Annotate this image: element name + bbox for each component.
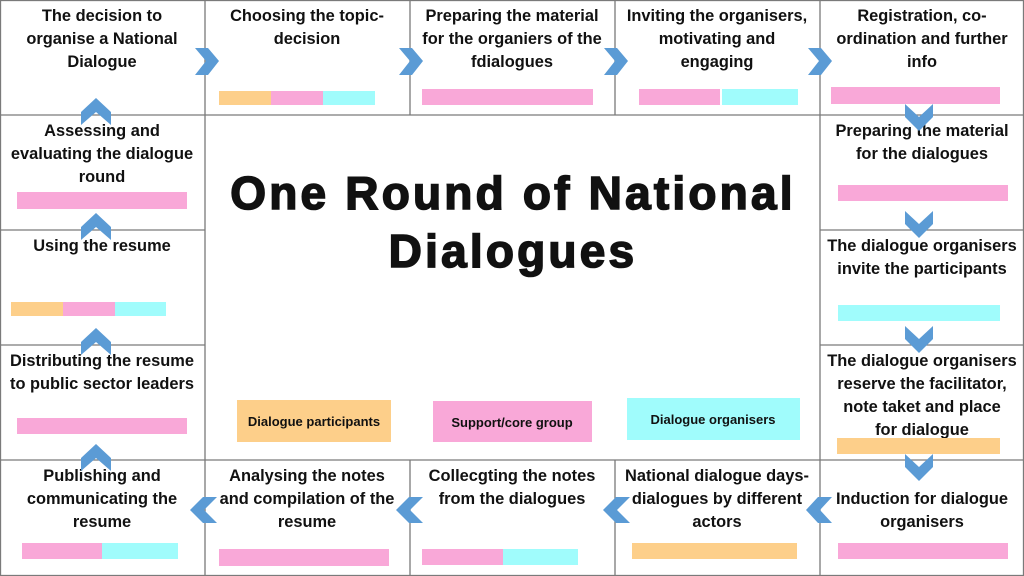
step: national dialogue days — [625, 467, 809, 559]
step: decision to organise: organise a National — [26, 30, 178, 48]
step: analysing notes: and compilation of the — [220, 490, 394, 508]
step: induction: Induction for dialogue — [836, 490, 1008, 508]
step: national dialogue days: National dialogue days- — [625, 467, 809, 485]
step: induction — [836, 490, 1008, 559]
step: publishing — [22, 467, 178, 559]
step: collecting notes: Collecgting the notes — [429, 467, 595, 485]
legend: Support/core group — [451, 415, 573, 430]
step: assessing: round — [79, 168, 125, 186]
step: registration — [831, 7, 1008, 104]
step: using resume — [11, 237, 171, 316]
step: invite participants: The dialogue organisers — [827, 237, 1017, 255]
arrows — [81, 48, 933, 523]
step: preparing material for organisers: for the organiers of the — [422, 30, 602, 48]
legend — [237, 398, 800, 442]
step: publishing: Publishing and — [43, 467, 161, 485]
step: analysing notes — [219, 467, 394, 566]
title — [230, 167, 796, 277]
step: assessing: Assessing and — [44, 122, 160, 140]
step: analysing notes: Analysing the notes — [229, 467, 385, 485]
step: choosing topic: decision — [274, 30, 340, 48]
step: preparing material for organisers: Preparing the material — [425, 7, 599, 25]
step: preparing material for organisers: fdialogues — [471, 53, 553, 71]
step: inviting organisers: Inviting the organisers, — [627, 7, 807, 25]
step: publishing: resume — [73, 513, 131, 531]
legend: Dialogue participants — [248, 414, 380, 429]
step: decision to organise — [26, 7, 178, 71]
step: registration: Registration, co- — [857, 7, 987, 25]
step: invite participants — [827, 237, 1017, 321]
step: registration: info — [907, 53, 937, 71]
step: collecting notes: from the dialogues — [439, 490, 585, 508]
step: reserve facilitator — [827, 352, 1017, 454]
step: using resume: Using the resume — [33, 237, 171, 255]
step: national dialogue days: dialogues by different — [632, 490, 803, 508]
step: decision to organise: The decision to — [42, 7, 162, 25]
step: choosing topic — [219, 7, 384, 105]
step: national dialogue days: actors — [692, 513, 742, 531]
step: reserve facilitator: The dialogue organisers — [827, 352, 1017, 370]
step: induction: organisers — [880, 513, 964, 531]
step: invite participants: invite the participants — [837, 260, 1007, 278]
step: assessing — [11, 122, 193, 209]
step: reserve facilitator: note taket and place — [843, 398, 1001, 416]
step: distributing: to public sector leaders — [10, 375, 194, 393]
step: reserve facilitator: reserve the facilitator, — [837, 375, 1007, 393]
step: collecting notes — [422, 467, 595, 565]
step: inviting organisers: engaging — [681, 53, 753, 71]
step: analysing notes: resume — [278, 513, 336, 531]
step: choosing topic: Choosing the topic- — [230, 7, 384, 25]
step: assessing: evaluating the dialogue — [11, 145, 193, 163]
step: inviting organisers — [627, 7, 807, 105]
step: preparing material for organisers — [422, 7, 602, 105]
step: inviting organisers: motivating and — [659, 30, 775, 48]
step: distributing — [10, 352, 194, 434]
step: decision to organise: Dialogue — [67, 53, 137, 71]
step: reserve facilitator: for dialogue — [875, 421, 969, 439]
step: preparing material for dialogues — [835, 122, 1009, 201]
step: preparing material for dialogues: Preparing the material — [835, 122, 1009, 140]
title: One Round of National — [230, 167, 796, 219]
step: publishing: communicating the — [27, 490, 177, 508]
step: registration: ordination and further — [836, 30, 1008, 48]
title: Dialogues — [389, 225, 637, 277]
legend: Dialogue organisers — [651, 412, 775, 427]
step: preparing material for dialogues: for the dialogues — [856, 145, 988, 163]
step: distributing: Distributing the resume — [10, 352, 194, 370]
